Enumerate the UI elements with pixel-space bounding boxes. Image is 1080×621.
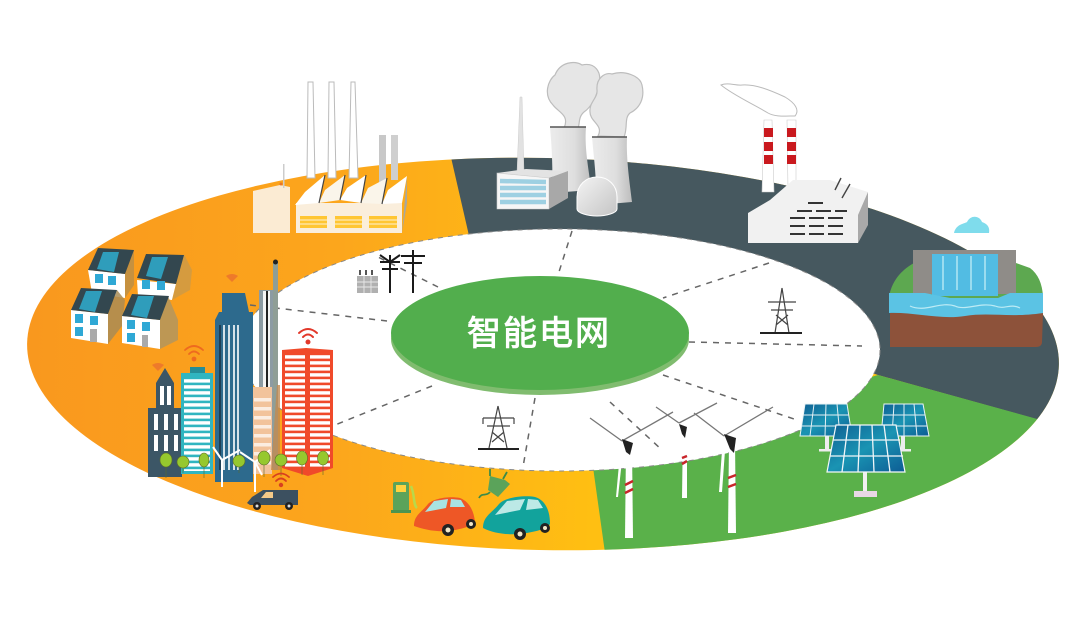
icon: coal power plant — [721, 84, 868, 243]
tan building — [253, 387, 272, 474]
house bottom left — [71, 288, 125, 344]
pole one — [380, 255, 400, 293]
cooling towers — [550, 127, 632, 205]
dam wall — [913, 250, 1016, 294]
ring segment: renewable energy in green — [594, 375, 1038, 550]
outer ring base: consumer zone in orange and yellow — [23, 140, 1080, 561]
small annex building — [253, 164, 290, 233]
red tower — [282, 348, 333, 476]
title: smart grid: 智能电网 — [467, 315, 611, 353]
solar panel left — [800, 404, 852, 452]
icon: hydroelectric dam — [889, 217, 1043, 347]
tall pole — [271, 260, 280, 470]
icon: pylon right — [760, 288, 802, 333]
house bottom right — [122, 294, 178, 349]
turbine left — [590, 412, 673, 538]
reactor dome — [577, 177, 617, 216]
cloud — [954, 217, 989, 233]
icon: teal electric car — [483, 496, 550, 540]
green hills — [889, 263, 1043, 305]
steam clouds — [547, 62, 643, 137]
factory chimneys — [307, 82, 358, 178]
ring segment: generation in dark slate — [452, 158, 1059, 420]
icon: charging pump — [391, 482, 417, 513]
brown earth — [890, 313, 1043, 347]
turbine middle — [656, 403, 717, 498]
icon: delivery truck — [247, 490, 298, 510]
house top right — [137, 254, 192, 300]
icon: plug — [479, 469, 510, 498]
central green disc with title — [391, 276, 689, 395]
pole two — [401, 250, 425, 293]
reservoir — [889, 293, 1043, 317]
blue skyscraper — [215, 293, 253, 482]
inner white grid disc — [240, 229, 880, 471]
wifi: truck — [273, 474, 289, 486]
antenna — [517, 97, 524, 172]
smoke outline — [721, 84, 797, 116]
spillway water — [932, 254, 998, 296]
house top left — [88, 248, 134, 298]
icon: nuclear power plant — [497, 62, 643, 216]
icon: red electric car — [414, 497, 476, 536]
striped chimneys — [762, 120, 796, 192]
wifi: cyan tower — [185, 346, 203, 360]
wifi signal icons — [152, 274, 317, 486]
radial dashed grid lines — [250, 231, 862, 467]
slate office block — [148, 368, 182, 477]
transformer box — [357, 270, 378, 293]
factory main hall — [295, 175, 407, 233]
plant building — [748, 178, 868, 243]
solar panel front — [827, 425, 905, 497]
wifi: office block — [152, 363, 164, 371]
wifi: red tower — [299, 329, 317, 344]
icon: pylon bottom — [478, 406, 519, 449]
icon: distribution poles and transformer — [357, 250, 425, 293]
thick stacks — [379, 135, 398, 185]
solar panel right — [881, 404, 929, 452]
icon: city skyline — [148, 260, 333, 492]
icon: solar houses — [71, 248, 192, 349]
icon: industrial factory — [253, 82, 407, 233]
street trees — [160, 451, 328, 478]
small turbines in city — [213, 447, 270, 492]
cyan tower — [181, 367, 213, 474]
control building — [497, 169, 568, 209]
turbine right — [694, 407, 773, 533]
gray slim tower — [259, 290, 273, 468]
icon: solar panels — [800, 404, 929, 497]
smart grid infographic — [27, 62, 1059, 550]
icon: wind turbines — [590, 403, 773, 538]
wifi: blue skyscraper — [226, 274, 238, 282]
